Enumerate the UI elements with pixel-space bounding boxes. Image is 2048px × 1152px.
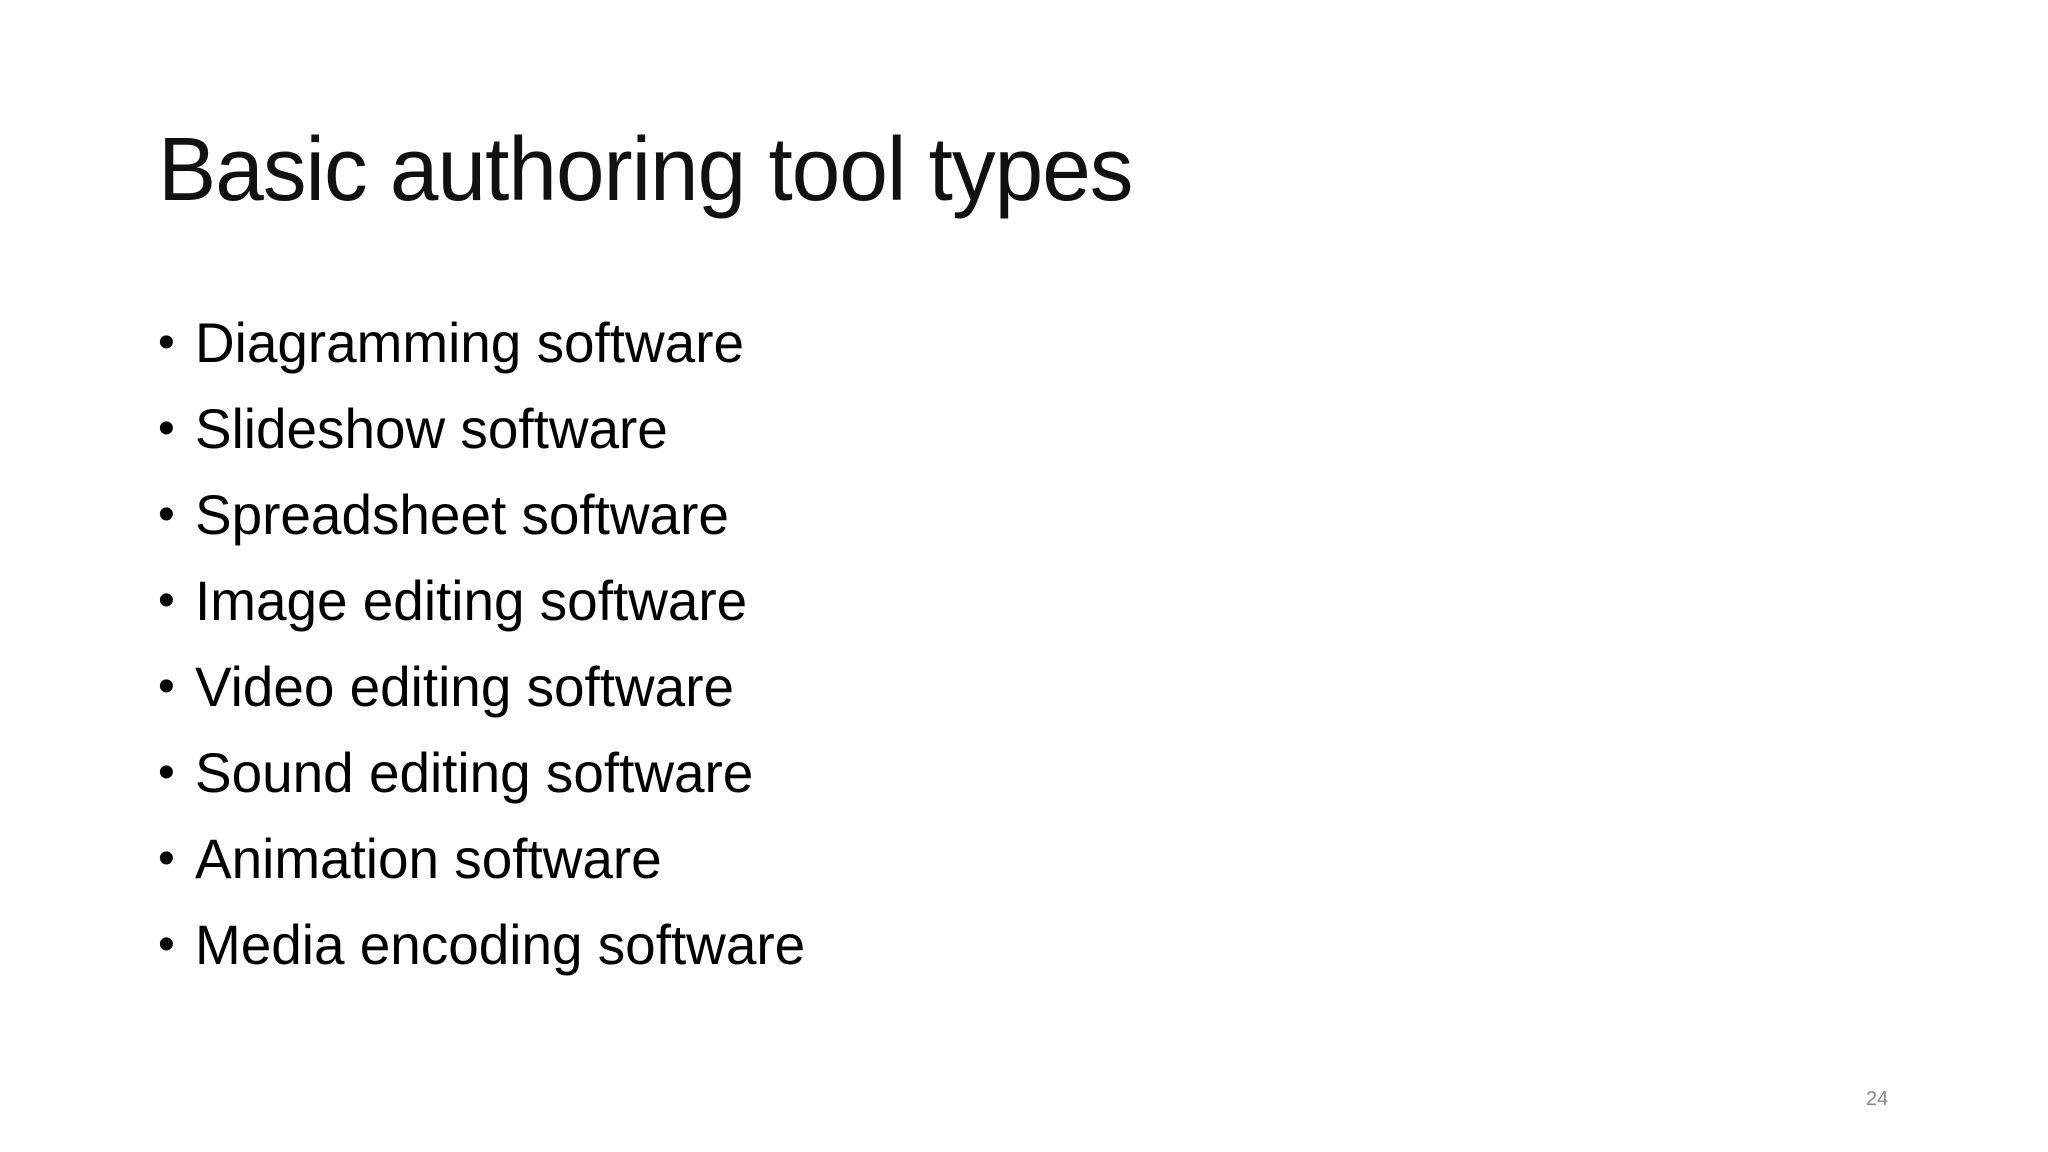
item 7: Animation software bbox=[195, 827, 662, 890]
item 1: Diagramming software bbox=[195, 311, 744, 374]
item 3: • bbox=[158, 488, 175, 541]
item 2: Slideshow software bbox=[195, 397, 668, 460]
page number: 24 bbox=[1866, 1088, 1888, 1110]
item 1: • bbox=[158, 316, 175, 369]
bullet list bbox=[158, 311, 805, 976]
item 8: • bbox=[158, 918, 175, 971]
item 6: • bbox=[158, 746, 175, 799]
item 5: Video editing software bbox=[195, 655, 734, 718]
item 6: Sound editing software bbox=[195, 741, 753, 804]
item 8: Media encoding software bbox=[195, 913, 805, 976]
item 2: • bbox=[158, 402, 175, 455]
item 7: • bbox=[158, 832, 175, 885]
item 4: • bbox=[158, 574, 175, 627]
item 3: Spreadsheet software bbox=[195, 483, 729, 546]
item 5: • bbox=[158, 660, 175, 713]
title: Basic authoring tool types bbox=[158, 120, 1132, 220]
item 4: Image editing software bbox=[195, 569, 747, 632]
